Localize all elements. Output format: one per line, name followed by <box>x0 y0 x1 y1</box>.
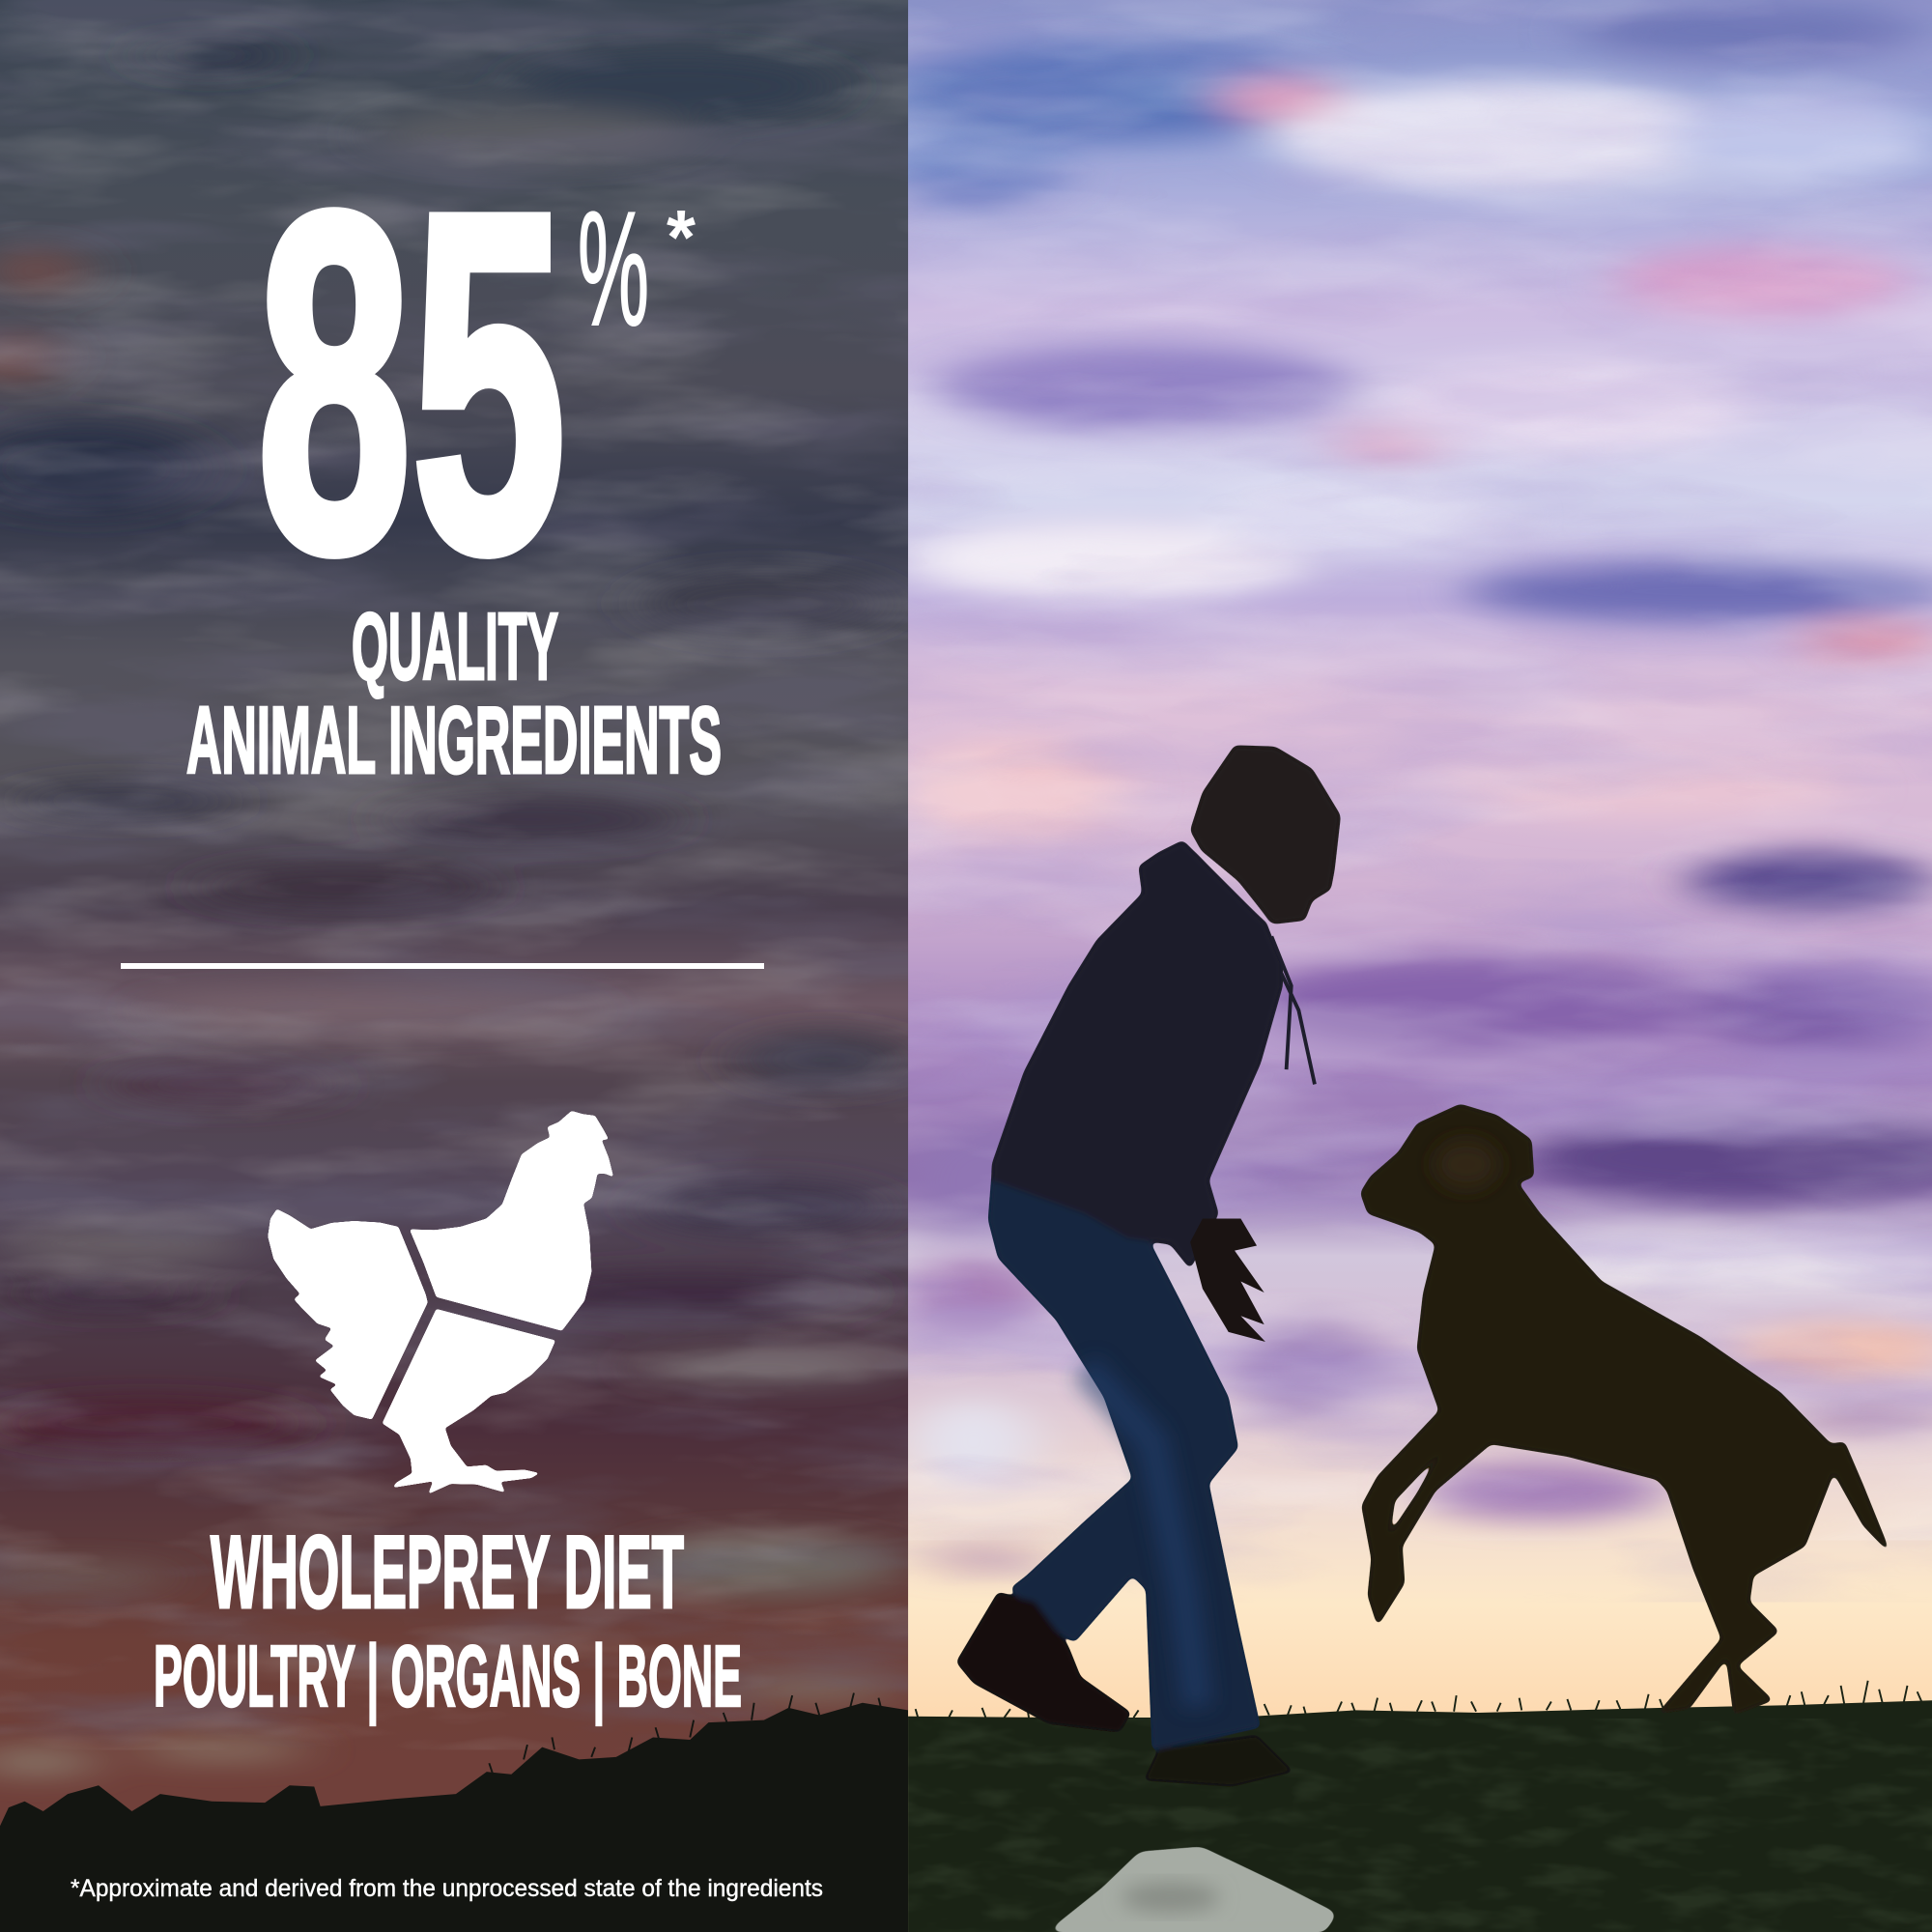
grass <box>916 1681 1922 1718</box>
infographic canvas: % <box>578 178 649 359</box>
jeans highlight <box>1084 1368 1198 1707</box>
planted foot <box>1144 1735 1293 1786</box>
person <box>956 746 1341 1786</box>
hand <box>1190 1218 1265 1342</box>
icon: chicken divided into three parts <box>268 1111 613 1494</box>
heading: wholeprey diet: WHOLEPREY DIET <box>211 1514 684 1630</box>
left sky cloud texture <box>0 0 908 1749</box>
jeans <box>988 1173 1261 1749</box>
left hill <box>0 1703 908 1932</box>
left hill grass <box>489 1693 881 1775</box>
right sky <box>887 0 1932 1932</box>
jacket <box>992 840 1283 1269</box>
head <box>1190 746 1341 924</box>
left sky <box>0 0 912 1932</box>
heading: animal ingredients: ANIMAL INGREDIENTS <box>186 687 722 793</box>
footnote: *Approximate and derived from the unprocessed state of the ingredients <box>71 1875 823 1902</box>
divider line <box>121 963 764 969</box>
drawstring <box>1271 936 1315 1084</box>
infographic canvas: POULTRY | ORGANS | BONE <box>154 1629 742 1726</box>
boot <box>956 1592 1131 1732</box>
rock <box>1047 1847 1337 1932</box>
right sky cloud texture <box>908 0 1932 1602</box>
ground texture <box>908 1719 1932 1932</box>
infographic canvas: QUALITY <box>352 593 558 699</box>
ground <box>908 1700 1932 1932</box>
dog <box>1360 1104 1891 1716</box>
asterisk: * <box>667 194 696 280</box>
stat: 85: 85 <box>257 113 566 651</box>
